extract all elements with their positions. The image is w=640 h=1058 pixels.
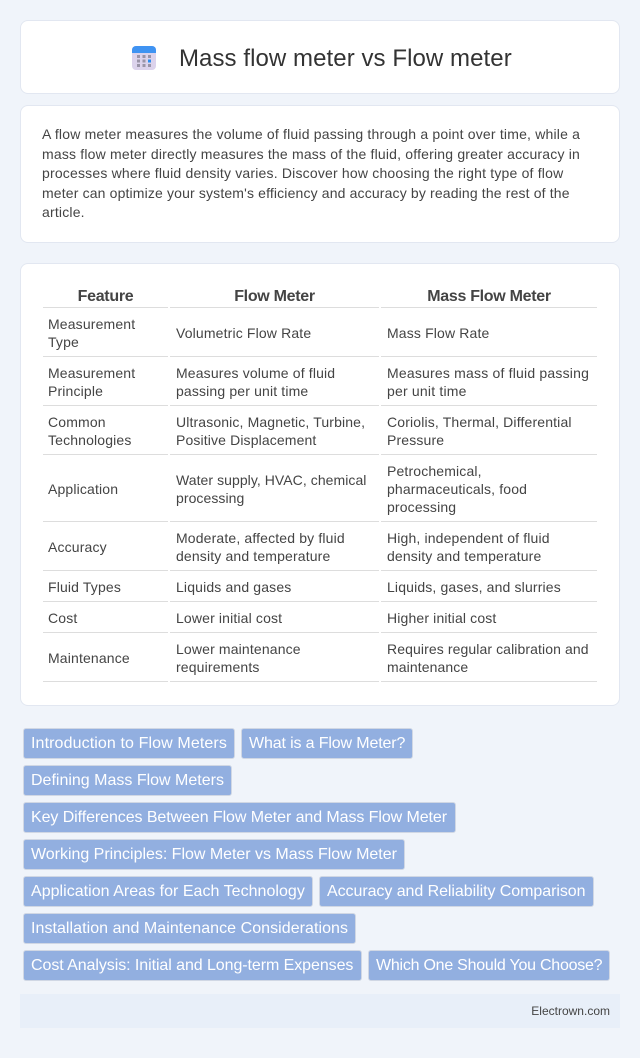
row: fluid types: Fluid Types bbox=[48, 578, 121, 594]
row: accuracy: High, independent of fluid bbox=[387, 530, 550, 546]
row: measurement principle bbox=[43, 364, 597, 406]
row: cost bbox=[43, 610, 597, 633]
row: common technologies: Technologies bbox=[48, 432, 132, 448]
row: accuracy: density and temperature bbox=[387, 548, 541, 564]
row: measurement type: Mass Flow Rate bbox=[387, 324, 489, 340]
row: measurement principle: Measures volume of fluid bbox=[176, 364, 335, 380]
icon: calendar grid bbox=[132, 46, 156, 70]
row: maintenance: Lower maintenance bbox=[176, 640, 301, 656]
button: cost analysis bbox=[23, 950, 362, 981]
header card bbox=[20, 20, 620, 94]
row: application: processing bbox=[176, 490, 244, 506]
row: measurement principle: passing per unit time bbox=[176, 382, 308, 398]
row: common technologies: Coriolis, Thermal, Differential bbox=[387, 414, 572, 430]
button: accuracy and reliability bbox=[319, 876, 594, 907]
button: defining mass flow meters: Defining Mass Flow Meters bbox=[31, 772, 224, 789]
button: introduction: Introduction to Flow Meters bbox=[31, 735, 227, 752]
row: accuracy bbox=[43, 530, 597, 571]
row: accuracy: density and temperature bbox=[176, 548, 330, 564]
table header: Flow Meter bbox=[234, 288, 315, 304]
button: what is a flow meter: What is a Flow Meter? bbox=[249, 735, 405, 752]
button: which one: Which One Should You Choose? bbox=[376, 957, 602, 974]
row: measurement type: Type bbox=[48, 334, 79, 350]
row: measurement type: Measurement bbox=[48, 316, 135, 332]
row: fluid types: Liquids and gases bbox=[176, 578, 291, 594]
row: maintenance: Requires regular calibration and bbox=[387, 640, 589, 656]
table header: Feature bbox=[78, 288, 133, 304]
footer bbox=[20, 994, 620, 1028]
intro card bbox=[20, 105, 620, 243]
button: application areas: Application Areas for Each Technology bbox=[31, 883, 305, 900]
button: application areas bbox=[23, 876, 313, 907]
row: application: Petrochemical, bbox=[387, 462, 482, 478]
row: measurement type bbox=[43, 316, 597, 357]
row: common technologies: Positive Displacement bbox=[176, 432, 316, 448]
intro text: processes where fluid density varies. Discover how choosing the right type of flow bbox=[42, 165, 563, 181]
row: measurement principle: Measurement bbox=[48, 364, 135, 380]
row: common technologies bbox=[43, 414, 597, 455]
row: measurement principle: per unit time bbox=[387, 382, 467, 398]
row: fluid types: Liquids, gases, and slurries bbox=[387, 578, 561, 594]
row: maintenance: requirements bbox=[176, 658, 260, 674]
row: fluid types bbox=[43, 578, 597, 602]
row: measurement principle: Principle bbox=[48, 382, 103, 398]
row: measurement principle: Measures mass of fluid passing bbox=[387, 364, 589, 380]
row: maintenance: Maintenance bbox=[48, 650, 130, 666]
row: cost: Higher initial cost bbox=[387, 610, 496, 626]
intro text: A flow meter measures the volume of fluid passing through a point over time, while a bbox=[42, 126, 580, 142]
row: application: processing bbox=[387, 498, 456, 514]
row: application: pharmaceuticals, food bbox=[387, 480, 527, 496]
button: key differences: Key Differences Between Flow Meter and Mass Flow Meter bbox=[31, 809, 447, 826]
row: maintenance: maintenance bbox=[387, 658, 468, 674]
comparison table bbox=[43, 288, 597, 682]
button: cost analysis: Cost Analysis: Initial and Long-term Expenses bbox=[31, 957, 353, 974]
row: accuracy: Accuracy bbox=[48, 538, 107, 554]
button: key differences bbox=[23, 802, 456, 833]
button: installation and maintenance bbox=[23, 913, 356, 944]
title: Mass flow meter vs Flow meter bbox=[179, 45, 512, 72]
intro text: meter can optimize your system's efficiency and accuracy by reading the rest of the bbox=[42, 184, 570, 200]
intro text bbox=[42, 126, 580, 220]
row: common technologies: Common bbox=[48, 414, 106, 430]
intro text: article. bbox=[42, 204, 85, 220]
button: introduction bbox=[23, 728, 235, 759]
row: cost: Cost bbox=[48, 610, 77, 626]
intro text: mass flow meter directly measures the mass of the fluid, offering greater accuracy in bbox=[42, 146, 580, 162]
row: accuracy: Moderate, affected by fluid bbox=[176, 530, 345, 546]
row: application: Application bbox=[48, 480, 118, 496]
button: working principles bbox=[23, 839, 405, 870]
row: measurement type: Volumetric Flow Rate bbox=[176, 324, 311, 340]
button: what is a flow meter bbox=[241, 728, 413, 759]
button: installation and maintenance: Installation and Maintenance Considerations bbox=[31, 920, 348, 937]
row: common technologies: Ultrasonic, Magnetic, Turbine, bbox=[176, 414, 365, 430]
row: common technologies: Pressure bbox=[387, 432, 444, 448]
row: application: Water supply, HVAC, chemical bbox=[176, 472, 366, 488]
button: accuracy and reliability: Accuracy and Reliability Comparison bbox=[327, 883, 585, 900]
row: maintenance bbox=[43, 640, 597, 682]
row: application bbox=[43, 462, 597, 522]
row: cost: Lower initial cost bbox=[176, 610, 282, 626]
table header: Mass Flow Meter bbox=[427, 288, 551, 304]
table header bbox=[43, 288, 597, 682]
button: which one bbox=[368, 950, 610, 981]
button: working principles: Working Principles: Flow Meter vs Mass Flow Meter bbox=[31, 846, 397, 863]
footer: Electrown.com bbox=[531, 1004, 610, 1018]
button: defining mass flow meters bbox=[23, 765, 232, 796]
table card bbox=[20, 263, 620, 706]
